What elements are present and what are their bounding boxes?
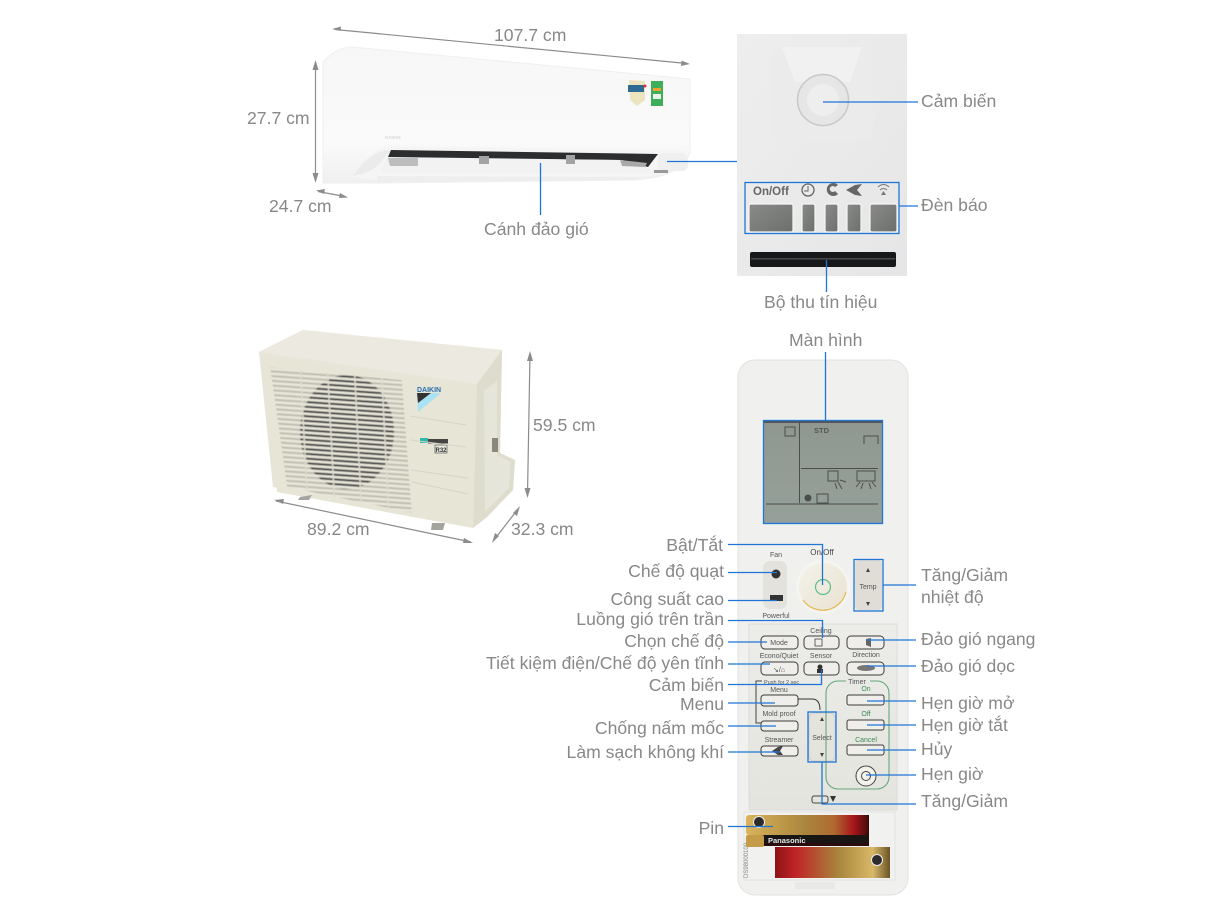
callout: Bật/Tắt: Bật/Tắt xyxy=(666,534,723,555)
callout: Cảm biến (remote): Cảm biến xyxy=(649,675,724,695)
callout: Hẹn giờ tắt: Hẹn giờ tắt xyxy=(921,714,1008,735)
connector: unit to sensor panel xyxy=(667,160,737,162)
feet xyxy=(298,495,445,530)
battery top: Panasonic xyxy=(768,836,806,845)
dimension: 107.7 cm: 107.7 cm xyxy=(494,25,566,45)
brand text on unit: DAIKIN xyxy=(385,135,400,140)
callout: Hẹn giờ mở: Hẹn giờ mở xyxy=(921,693,1015,713)
icon: streamer xyxy=(846,184,862,196)
LED windows xyxy=(749,204,897,232)
row buttons: Mold proof xyxy=(762,711,796,718)
depth arrow 24.7 xyxy=(316,189,348,198)
remote bottom clip xyxy=(795,882,835,889)
Temp button: Temp xyxy=(859,584,877,591)
callout: Cảm biến (remote) xyxy=(649,670,822,695)
Fan / Powerful pill: Powerful xyxy=(762,613,790,620)
On/Off button xyxy=(796,548,850,614)
callout: Công suất cao: Công suất cao xyxy=(611,589,724,609)
callout: Đảo gió ngang: Đảo gió ngang xyxy=(921,629,1035,649)
height arrow 27.7 xyxy=(312,60,318,183)
logo: Daikin: DAIKIN xyxy=(417,387,441,394)
callout: Tăng/Giảm nhiệt độ xyxy=(854,560,1008,611)
receiver bar xyxy=(750,252,896,267)
callout: Luồng gió trên trần: Luồng gió trên trần xyxy=(576,609,724,629)
callout: Tăng/Giảm nhiệt độ: nhiệt độ xyxy=(921,587,984,607)
side vent xyxy=(492,438,498,452)
energy badge xyxy=(628,80,663,106)
icon: battery indicator xyxy=(812,796,836,803)
row buttons: Menu xyxy=(770,687,788,694)
callout: Tăng/Giảm xyxy=(808,712,1008,811)
Select button: Select xyxy=(812,735,832,742)
icon: timer xyxy=(802,184,814,196)
callout: Bộ thu tín hiệu: Bộ thu tín hiệu xyxy=(764,292,877,312)
icon: wifi xyxy=(878,184,889,195)
callout: Cánh đảo gió: Cánh đảo gió xyxy=(484,219,589,239)
callout: Đèn báo: Đèn báo xyxy=(921,195,988,215)
battery bottom xyxy=(775,847,890,878)
row buttons: Ceiling xyxy=(810,628,832,635)
callout: Chống nấm mốc: Chống nấm mốc xyxy=(595,718,724,738)
dimension: 89.2 cm: 89.2 cm xyxy=(307,519,370,539)
width arrow 89.2 xyxy=(274,499,473,543)
panel: indoor display close-up xyxy=(737,34,907,276)
height arrow 59.5 xyxy=(524,351,533,498)
callout: Màn hình: Màn hình xyxy=(789,330,862,350)
Timer group xyxy=(826,677,889,789)
panel: indoor display close-up: On/Off xyxy=(753,186,789,198)
indoor unit xyxy=(323,47,690,183)
callout: Menu: Menu xyxy=(680,694,724,714)
Temp button xyxy=(855,560,882,610)
dimension: 59.5 cm: 59.5 cm xyxy=(533,415,596,435)
row buttons: Push for 2 sec xyxy=(764,680,799,686)
callout: Bật/Tắt xyxy=(666,534,822,585)
dimension: 24.7 cm: 24.7 cm xyxy=(269,196,332,216)
callout: Chọn chế độ: Chọn chế độ xyxy=(624,631,724,651)
callout: Màn hình xyxy=(764,330,882,524)
row buttons: Sensor xyxy=(810,653,833,660)
On/Off button: On/Off xyxy=(810,548,834,557)
callout: Bộ thu tín hiệu xyxy=(764,260,877,312)
row buttons: Mode xyxy=(770,640,788,647)
logo: Daikin xyxy=(417,387,441,412)
depth arrow 32.3 xyxy=(492,506,520,543)
Timer group: Cancel xyxy=(855,737,877,744)
row buttons xyxy=(756,628,884,756)
Timer group: Timer xyxy=(848,679,866,686)
callout: Pin xyxy=(699,818,773,838)
text: serial: DS98000100 xyxy=(744,842,750,878)
row buttons: Econo/Quiet xyxy=(760,653,798,660)
button panel xyxy=(749,624,897,810)
callout: Tiết kiệm điện/Chế độ yên tĩnh: Tiết kiệm điện/Chế độ yên tĩnh xyxy=(486,653,724,673)
badge: R32 xyxy=(420,438,448,454)
callout: Làm sạch không khí: Làm sạch không khí xyxy=(567,742,724,762)
fan grille xyxy=(270,367,412,513)
row buttons: Direction xyxy=(852,652,880,659)
callout: Hẹn giờ xyxy=(866,764,984,784)
Timer group: Off xyxy=(861,711,871,718)
dimension: 32.3 cm: 32.3 cm xyxy=(511,519,574,539)
LCD screen: STD xyxy=(814,426,830,435)
width arrow 107.7 xyxy=(332,26,690,66)
Fan / Powerful pill xyxy=(762,552,790,620)
callout: Đèn báo xyxy=(745,182,988,234)
callout: Menu xyxy=(680,694,775,714)
battery top xyxy=(746,815,869,847)
remote control xyxy=(738,360,908,895)
Fan / Powerful pill: Fan xyxy=(770,552,782,559)
callout: Pin: Pin xyxy=(699,818,724,838)
callout: Hẹn giờ: Hẹn giờ xyxy=(921,764,984,784)
callout: Tăng/Giảm: Tăng/Giảm xyxy=(921,791,1008,811)
callout: Luồng gió trên trần xyxy=(576,609,822,638)
callout: Cảm biến: Cảm biến xyxy=(921,91,996,111)
callout: Đảo gió dọc: Đảo gió dọc xyxy=(921,656,1015,676)
badge: R32: R32 xyxy=(435,448,447,454)
Timer group: On xyxy=(861,686,871,693)
battery compartment xyxy=(744,812,895,880)
callout: Hủy: Hủy xyxy=(921,739,952,759)
icon: mold proof xyxy=(827,183,838,196)
LCD screen xyxy=(764,421,882,523)
callout: Hủy xyxy=(867,739,952,759)
Select button xyxy=(809,713,835,761)
dimension: 27.7 cm: 27.7 cm xyxy=(247,108,310,128)
row buttons: Streamer xyxy=(765,737,794,744)
callout: Tăng/Giảm nhiệt độ: Tăng/Giảm xyxy=(921,565,1008,585)
callout: Cánh đảo gió xyxy=(484,163,589,239)
callout: Chế độ quạt: Chế độ quạt xyxy=(628,561,724,581)
row buttons: ↘/⌂ xyxy=(773,667,785,674)
outdoor unit xyxy=(259,330,515,530)
